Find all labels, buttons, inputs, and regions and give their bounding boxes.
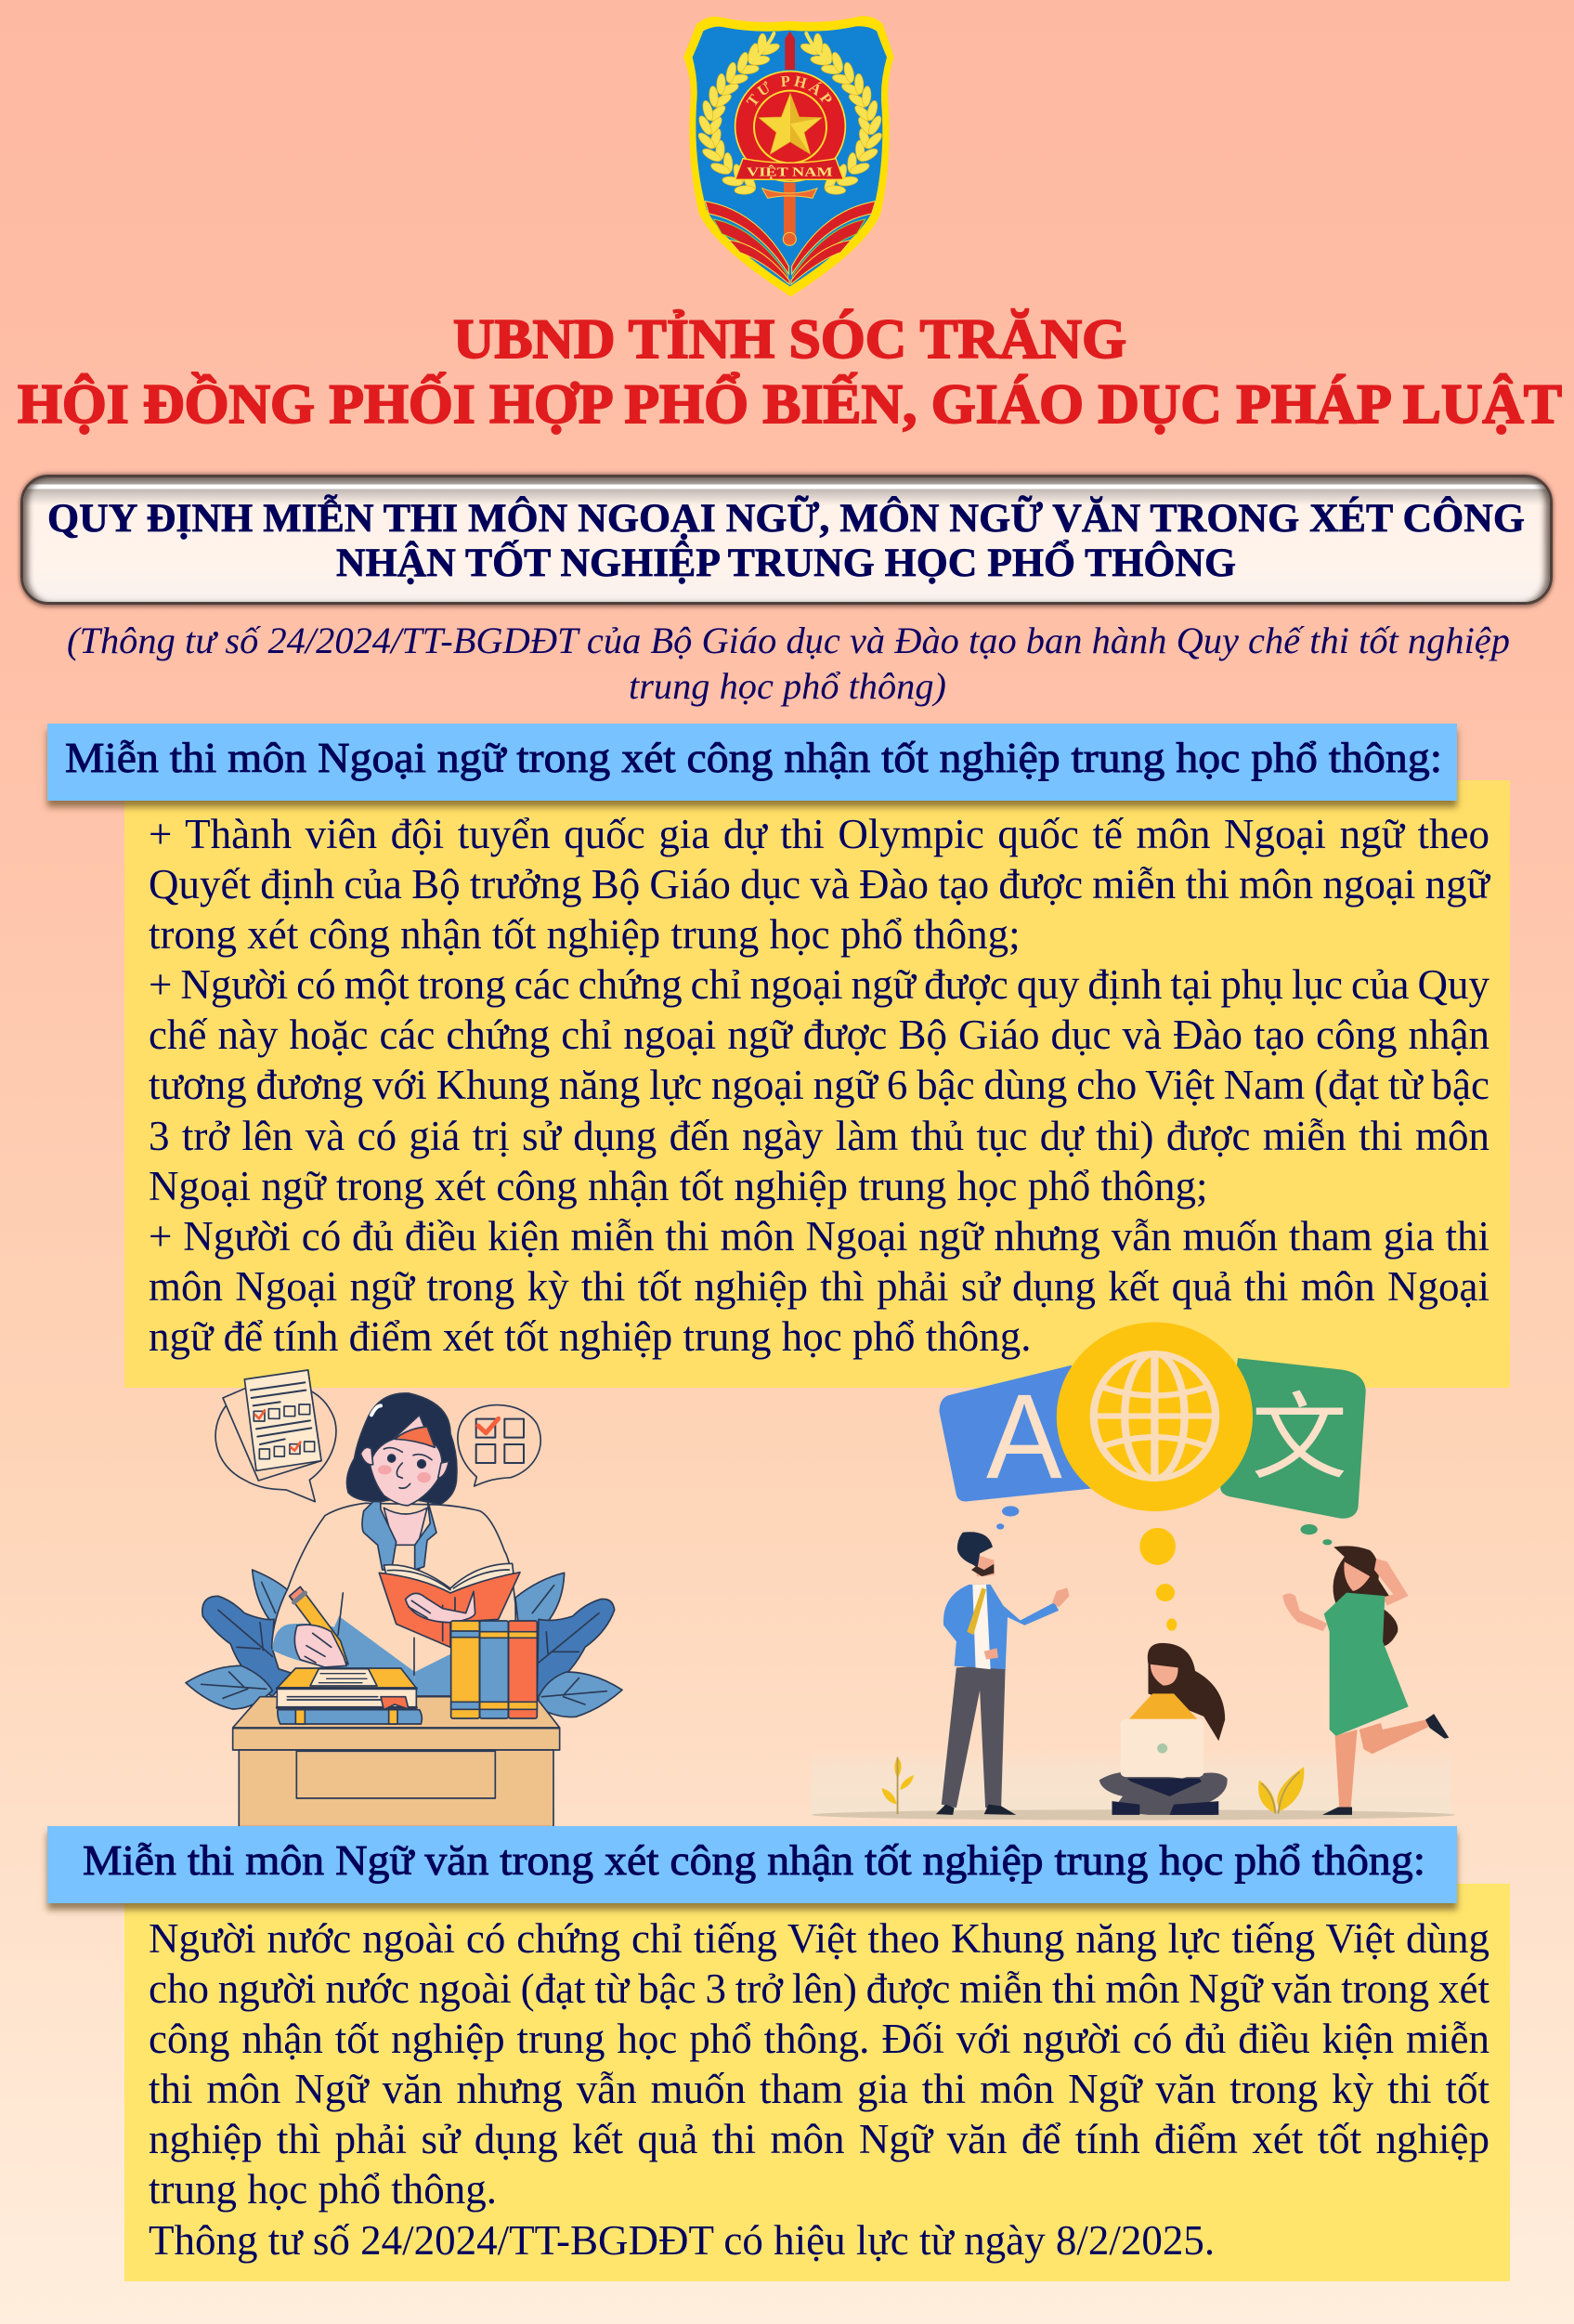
desk [233, 1697, 560, 1827]
text block: literature rules: trung học phổ thông. [149, 2166, 497, 2213]
text block: literature rules: nghiệp thì phải sử dụng kết quả thi môn Ngữ văn để tính điểm xét tốt nghiệp [149, 2116, 1489, 2162]
subtitle: legal reference: trung học phổ thông) [629, 665, 946, 707]
stack of books on desk [277, 1668, 422, 1724]
heading: document title: NHẬN TỐT NGHIỆP TRUNG HỌC PHỔ THÔNG [336, 540, 1236, 585]
icon: green letter bubble: 文 [1252, 1362, 1347, 1498]
panel: yellow text box one [124, 780, 1510, 1388]
sword [762, 31, 817, 245]
speech bubble with exam paper [215, 1370, 336, 1502]
text block: literature rules: Người nước ngoài có chứng chỉ tiếng Việt theo Khung năng lực tiếng Việt dùng [149, 1915, 1489, 1962]
title: UBND TỈNH SÓC TRĂNG [453, 308, 1126, 370]
heading: document title [47, 494, 1525, 585]
text block: literature rules: cho người nước ngoài (đạt từ bậc 3 trở lên) được miễn thi môn Ngữ văn trong xét [149, 1965, 1489, 2012]
pencil and hand [290, 1586, 348, 1667]
text block: foreign language rules: môn Ngoại ngữ trong kỳ thi tốt nghiệp thì phải sử dụng kết quả thi môn Ngoại [149, 1263, 1489, 1310]
panel: document title box [20, 475, 1553, 605]
seated woman with laptop [1099, 1643, 1228, 1815]
text block: foreign language rules: ngữ để tính điểm xét tốt nghiệp trung học phổ thông. [149, 1313, 1032, 1360]
heading text: Miễn thi môn Ngữ văn trong xét công nhận tốt nghiệp trung học phổ thông: [83, 1836, 1425, 1884]
text block: foreign language rules: 3 trở lên và có giá trị sử dụng đến ngày làm thủ tục dự thi) được miễn thi môn [149, 1113, 1489, 1159]
speech bubble with checklist [458, 1405, 540, 1486]
small plants [882, 1757, 1304, 1814]
text block: literature rules: Thông tư số 24/2024/TT-BGDĐT có hiệu lực từ ngày 8/2/2025. [149, 2217, 1215, 2264]
emblem: Tư Pháp Việt Nam shield [683, 16, 894, 297]
text block: literature rules [149, 1915, 1489, 2264]
text block: foreign language rules: Ngoại ngữ trong xét công nhận tốt nghiệp trung học phổ thông; [149, 1163, 1207, 1209]
title: HỘI ĐỒNG PHỐI HỢP PHỔ BIẾN, GIÁO DỤC PHÁP LUẬT [18, 373, 1562, 435]
text block: literature rules: công nhận tốt nghiệp trung học phổ thông. Đối với người có đủ điều kiện miễn [149, 2016, 1489, 2062]
text block: foreign language rules: chế này hoặc các chứng chỉ ngoại ngữ được Bộ Giáo dục và Đào tạo công nhận [149, 1012, 1489, 1058]
person [272, 1393, 517, 1695]
ribbon: Việt Nam: VIỆT NAM [747, 164, 833, 180]
ground [812, 1749, 1455, 1820]
text block: foreign language rules [149, 811, 1491, 1360]
icon: blue letter bubble [940, 1365, 1093, 1530]
open orange book [379, 1563, 520, 1647]
book wings [705, 202, 876, 284]
text block: foreign language rules: + Người có đủ điều kiện miễn thi môn Ngoại ngữ nhưng vẫn muốn tham gia thi [149, 1213, 1489, 1260]
subtitle: legal reference: (Thông tư số 24/2024/TT-BGDĐT của Bộ Giáo dục và Đào tạo ban hành Quy chế thi tốt nghiệp [67, 620, 1510, 661]
text block: foreign language rules: + Người có một trong các chứng chỉ ngoại ngữ được quy định tại phụ lục của Quy [149, 961, 1489, 1008]
icon: blue letter bubble: A [986, 1369, 1062, 1505]
icon: yellow globe [1057, 1323, 1253, 1631]
heading text: Miễn thi môn Ngoại ngữ trong xét công nhận tốt nghiệp trung học phổ thông: [65, 734, 1442, 781]
illustration: student studying at desk [185, 1369, 623, 1826]
subtitle: legal reference [67, 620, 1510, 707]
red medallion: TƯ PHÁP [746, 76, 832, 106]
ribbon: Việt Nam [735, 159, 843, 180]
woman in green dress [1282, 1546, 1449, 1815]
red medallion [734, 71, 847, 182]
heading: document title: QUY ĐỊNH MIỄN THI MÔN NGOẠI NGỮ, MÔN NGỮ VĂN TRONG XÉT CÔNG [47, 495, 1525, 541]
icon: green letter bubble [1220, 1358, 1366, 1545]
text block: foreign language rules: + Thành viên đội tuyển quốc gia dự thi Olympic quốc tế môn Ngoại ngữ theo [149, 811, 1489, 857]
illustration: people with language speech bubbles [812, 1323, 1455, 1821]
title [18, 308, 1562, 435]
row of upright books [451, 1621, 537, 1718]
plants [186, 1570, 622, 1717]
man in blue jacket [936, 1532, 1070, 1815]
wreath [696, 33, 884, 195]
heading bar: literature exemption [47, 1826, 1457, 1903]
text block: foreign language rules: tương đương với Khung năng lực ngoại ngữ 6 bậc dùng cho Việt Nam (đạt từ bậc [149, 1062, 1489, 1108]
text block: foreign language rules: Quyết định của Bộ trưởng Bộ Giáo dục và Đào tạo được miễn thi môn ngoại ngữ [149, 861, 1489, 907]
text block: foreign language rules: trong xét công nhận tốt nghiệp trung học phổ thông; [149, 911, 1021, 958]
panel: yellow text box two [124, 1884, 1510, 2281]
text block: literature rules: thi môn Ngữ văn nhưng vẫn muốn tham gia thi môn Ngữ văn trong kỳ thi tốt [149, 2066, 1489, 2112]
heading bar: foreign language exemption [47, 724, 1457, 801]
